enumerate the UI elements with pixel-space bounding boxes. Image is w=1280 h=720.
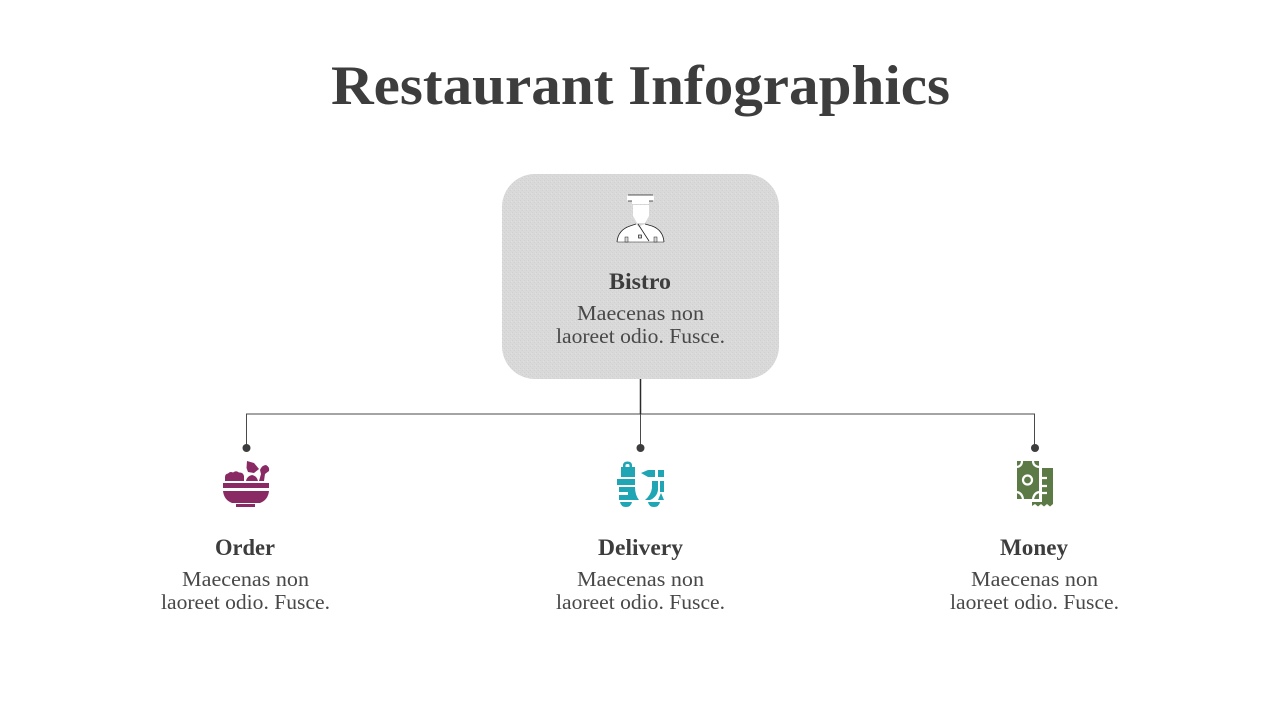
icon: money banknote <box>1017 461 1053 506</box>
icon: salad bowl <box>223 461 269 507</box>
heading: Delivery: Delivery <box>598 535 684 560</box>
text: Delivery description: laoreet odio. Fusce. <box>556 590 725 614</box>
icon: delivery scooter <box>617 462 664 507</box>
text: Delivery description: Maecenas non <box>577 567 705 591</box>
text: Money description: laoreet odio. Fusce. <box>950 590 1119 614</box>
heading: Bistro: Bistro <box>609 269 671 294</box>
panel: Order <box>161 461 330 614</box>
text: Bistro description: laoreet odio. Fusce. <box>556 324 725 348</box>
text: Order description: Maecenas non <box>182 567 310 591</box>
icon: chef <box>617 195 664 242</box>
text: Money description: Maecenas non <box>971 567 1099 591</box>
title: Restaurant Infographics <box>331 55 950 117</box>
text: Bistro description: Maecenas non <box>577 301 705 325</box>
panel: Money <box>950 461 1119 614</box>
connector lines <box>242 379 1039 452</box>
panel: Bistro <box>502 174 779 379</box>
text: Order description: laoreet odio. Fusce. <box>161 590 330 614</box>
heading: Order: Order <box>215 535 275 560</box>
panel: Delivery <box>556 462 725 614</box>
heading: Money: Money <box>1000 535 1068 560</box>
